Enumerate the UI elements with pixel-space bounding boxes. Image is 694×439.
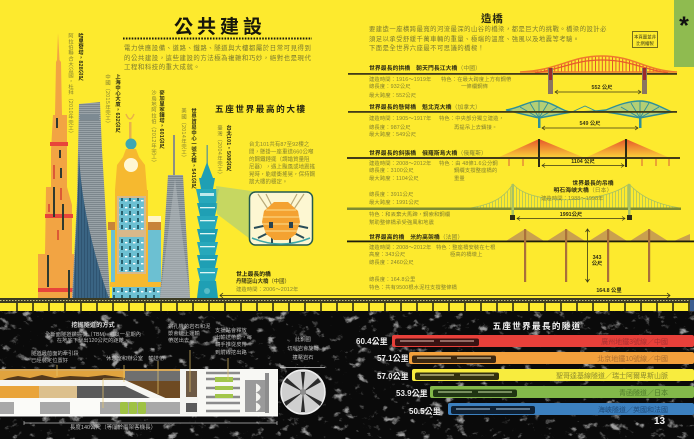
bridge 4: suspension bridge: 總長度：3911公尺	[369, 190, 414, 198]
bridge 3: cable-stayed bridge: 最大跨度：1104公尺	[369, 174, 419, 182]
bridge 3: cable-stayed bridge: 建造時間：2008～2012年	[369, 159, 432, 167]
bridge 3: cable-stayed bridge: 世界最長的斜張橋 俄羅斯島大橋（俄羅斯）	[369, 149, 487, 157]
vertical label: Abraj Al-Bait	[150, 89, 165, 165]
bridge 5: viaduct	[347, 229, 694, 294]
bridges intro paragraph: 要建造一座橫跨最寬的河流最深的山谷的橋梁，都是巨大的挑戰。橋梁的設計必	[369, 24, 607, 33]
text: spoil: 鑽孔機的岩石和泥	[168, 322, 211, 330]
cutter head	[281, 370, 325, 414]
length dimension	[24, 421, 277, 431]
length dimension: 長度140公尺（等同於兩架客機長）	[70, 423, 156, 431]
tunnel 1: Guangzhou: 廣州地鐵3號線／中國	[601, 337, 668, 346]
longest bridge note: 建造時間：2006～2012年	[236, 285, 299, 293]
bridge 4: suspension bridge: 建造時間：1988～1998年	[541, 194, 604, 202]
bridge 1: arch bridge: 552 公尺	[592, 83, 613, 91]
vertical label: Taipei 101: 臺灣（2004年完工）	[216, 124, 223, 178]
bridge 5: viaduct: 世界最高的橋 米約高架橋（法國）	[369, 233, 463, 241]
text: front shield: 已經裝定位置好	[31, 356, 69, 364]
building: One World Trade Center	[160, 135, 190, 298]
text: support station: 支援站會釋放	[215, 326, 247, 334]
zoom wedge from tower to damper	[216, 186, 258, 245]
building: Shanghai Tower	[72, 102, 110, 298]
vertical label: Abraj Al-Bait: 麥加皇家鐘塔，601公尺	[158, 89, 165, 150]
bridges intro paragraph: 下面是全世界六座最不可思議的橋樑！	[369, 43, 485, 52]
bridge 3: cable-stayed bridge: 鋼纜支撐整座橋的	[454, 166, 497, 174]
note box: not to scale: 比例繪製	[636, 40, 654, 47]
bridge 4: suspension bridge: 幫助整條橋承受強風和地震	[369, 218, 435, 226]
railway bridge deck	[0, 298, 694, 312]
vertical label: One World Trade Center	[180, 107, 197, 190]
bridge 1: arch bridge: 建造時間：1916～1919年	[369, 75, 432, 83]
bridge 2: cantilever bridge: 世界最長的懸臂橋 魁北克大橋（加拿大）	[369, 103, 481, 111]
diagram leader lines	[57, 350, 228, 408]
tunnel 3: Gotthard: 57.0公里	[377, 372, 409, 381]
text: front shield: 隧道最前面的牽引段	[31, 349, 79, 357]
tunnel 2: Beijing	[377, 352, 694, 364]
bridge 5: viaduct: 總長度：164.8公里	[369, 275, 416, 283]
intro paragraph: 的公共建設，這些建設的方法極為複雜和巧妙，絕對也是現代	[124, 53, 311, 62]
bridge 5: viaduct: 特色：整座橋安裝在七根	[436, 243, 496, 251]
text: spoil: 帶送出去	[168, 336, 190, 344]
text: support station: 輛手推從皮帶	[215, 340, 247, 348]
tunnel 3: Gotthard	[377, 369, 694, 381]
bridge 2: cantilever bridge	[348, 101, 677, 138]
bridge 2: cantilever bridge: 總長度：987公尺	[369, 123, 411, 131]
bridge 2: cantilever bridge: 建造時間：1905～1917年	[369, 114, 432, 122]
bridge 4: suspension bridge	[347, 179, 681, 226]
tunnel 5: Channel: 海峽隧道／英國和法國	[598, 405, 668, 414]
longest bridge note: 丹陽崑山大橋（中國）	[236, 277, 290, 285]
callout: tuned mass damper	[250, 192, 312, 245]
text: how tunnels are bored: 在地底下鑿出120公尺的距離。	[57, 336, 129, 344]
bridge 5: viaduct: 164.8 公里	[596, 286, 622, 294]
vertical label: Burj Khalifa	[67, 32, 84, 137]
bridge 2: cantilever bridge: 特色：中央部分獨立建造，	[439, 114, 504, 122]
green section tab with asterisk: *	[679, 12, 689, 40]
bridges intro paragraph	[369, 24, 607, 52]
tunnel 4: Seikan: 青函隧道／日本	[619, 388, 668, 397]
Taipei 101 damper text: 間，懸掛一座重達660公噸	[249, 148, 314, 156]
bridges intro paragraph: 須足以承受舒緩千萬車輛的重量、極端的溫度、強風以及地震等考驗。	[369, 34, 580, 43]
vertical label: Shanghai Tower: 中國（2015年完工）	[104, 73, 111, 127]
text: how tunnels are bored	[45, 321, 141, 344]
bridge 4: suspension bridge: 世界最長的吊橋	[572, 179, 614, 187]
bridge 4: suspension bridge: 特色：和丟棄大馬蹄，鋼索和鋼纜	[369, 210, 451, 218]
tunnel 5: Channel	[409, 403, 694, 416]
text: cutter head: 切削岩會旋轉	[287, 344, 320, 352]
tunnel 3: Gotthard: 聖哥達基線隧道／瑞士阿爾卑斯山脈	[556, 371, 668, 380]
rock texture	[0, 311, 694, 439]
tunnel 4: Seikan: 53.9公里	[396, 389, 428, 398]
vertical label: Shanghai Tower	[104, 73, 121, 134]
bridge 5: viaduct: 公尺	[592, 259, 603, 267]
text: how tunnels are bored: 全斷面隧道鑽掘機（TBM）可以一星期內	[45, 330, 141, 338]
bridge 1: arch bridge: 世界最長的拱橋 朝天門長江大橋（中國）	[369, 64, 481, 72]
bridge 3: cable-stayed bridge: 總長度：3100公尺	[369, 166, 414, 174]
tunnel 2: Beijing: 57.1公里	[377, 354, 409, 363]
vertical label: Burj Khalifa: 哈里發塔，828公尺	[77, 32, 84, 82]
bridge 4: suspension bridge: 最大跨度：1991公尺	[369, 198, 420, 206]
dotted divider	[123, 38, 312, 40]
text: support station	[215, 326, 253, 356]
tunnel 4: Seikan	[396, 386, 694, 398]
vertical label: Taipei 101	[216, 124, 232, 178]
title: 公共建設	[174, 16, 266, 38]
heading: bridges: 造橋	[481, 12, 504, 25]
bridge 5: viaduct: 特色：共有9500根水泥柱支撐整條橋	[369, 283, 458, 291]
note box: not to scale	[632, 32, 658, 48]
bridge 3: cable-stayed bridge: 1104 公尺	[571, 157, 595, 165]
heading: five longest tunnels: 五座世界最長的隧道	[492, 320, 582, 331]
bridge 2: cantilever bridge: 549 公尺	[580, 119, 601, 127]
vertical label: One World Trade Center: 美國（2014年完工）	[180, 107, 187, 161]
arrow: full bridge length	[220, 293, 670, 298]
bridge 4: suspension bridge: 1991公尺	[560, 210, 583, 218]
vertical label: Taipei 101: 台北101，508公尺	[225, 124, 232, 173]
bridge 5: viaduct: 極高的橋墩上	[450, 250, 483, 258]
text: cutter head: 撞擊岩石	[292, 353, 314, 361]
bridge 2: cantilever bridge: 最大跨度：549公尺	[369, 130, 417, 138]
Taipei 101 damper text: 尼器），遇上颱風或地震搖	[249, 162, 316, 170]
Taipei 101 damper text: 台北101共有87至92樓之	[249, 140, 310, 148]
page background	[0, 0, 694, 311]
text: front shield	[31, 349, 79, 364]
tunnel 1: Guangzhou	[356, 335, 694, 347]
text: spoil: 漿會送上運輸	[168, 329, 200, 337]
bridge 3: cable-stayed bridge: 特色：由 48條1.6公分鋼	[439, 159, 498, 167]
bridge 1: arch bridge: 一條纜鋼條	[461, 82, 489, 90]
vertical label: Shanghai Tower: 上海中心大廈，632公尺	[114, 73, 121, 134]
Taipei 101 damper text: 的鋼鐵錘擺（調諧質量阻	[249, 155, 310, 163]
intro paragraph: 工程和科技的重大成就。	[124, 62, 200, 71]
page number: 13	[654, 416, 666, 427]
text: rest rooms and conveyor: 休息室和辦公室 輸送帶	[106, 354, 164, 362]
text: how tunnels are bored: 挖掘隧道的方式	[71, 321, 115, 329]
bridge 5: viaduct: 高度：343公尺	[369, 250, 406, 258]
bridge 4: suspension bridge: 明石海峽大橋（日本）	[554, 186, 612, 194]
tunnel 2: Beijing: 北京地鐵10號線／中國	[597, 354, 668, 363]
text: spoil	[168, 322, 211, 344]
Taipei 101 damper text	[249, 140, 316, 186]
bridge 5: viaduct: 建造時間：2008～2012年	[369, 243, 432, 251]
vertical label: One World Trade Center: 世界貿易中心一號大樓，541公尺	[190, 107, 197, 190]
vertical label: Burj Khalifa: 阿拉伯聯合大公國，杜拜（2010年完工）	[67, 32, 74, 137]
vertical label: Abraj Al-Bait: 沙烏地阿拉伯（2012年完工）	[150, 90, 157, 165]
intro paragraph: 電力供應設備、道路、鐵路、隧道與大樓都屬於日常可見得到	[124, 43, 311, 52]
building: Taipei 101	[196, 145, 219, 298]
text: support station: 出輸送帶動，每	[215, 333, 253, 341]
bridge 3: cable-stayed bridge	[347, 139, 680, 182]
text: support station: 到前線挖出路	[215, 348, 247, 356]
longest bridge note: 世上最長的橋	[236, 270, 271, 278]
bridge 1: arch bridge: 最大跨度：552公尺	[369, 91, 417, 99]
tunnel boring machine diagram	[0, 369, 278, 416]
note box: not to scale: 本頁圖並非	[634, 34, 657, 40]
tunnel 5: Channel: 50.5公里	[409, 407, 441, 416]
longest bridge note	[236, 270, 299, 293]
bridge 5: viaduct: 343	[593, 255, 601, 261]
bridge 2: cantilever bridge: 再提吊上去鑄接。	[454, 123, 497, 131]
bridge 1: arch bridge	[348, 56, 677, 99]
Taipei 101 damper text: 晃時，能緩衝搖晃，保持鋼	[249, 170, 316, 178]
bridge 3: cable-stayed bridge: 重量	[454, 174, 465, 182]
building: Burj Khalifa	[38, 33, 74, 298]
black ground band	[0, 311, 694, 439]
bridge 5: viaduct: 總長度：2460公尺	[369, 258, 414, 266]
text: cutter head	[280, 335, 325, 368]
bridge 1: arch bridge: 總長度：932公尺	[369, 82, 411, 90]
green section tab with asterisk	[674, 0, 694, 67]
bridge 1: arch bridge: 特色：在最大跨度上方有鋼帶	[441, 75, 511, 83]
building: Abraj Al-Bait clock tower	[108, 114, 162, 298]
text: cutter head: 此鋼圈	[295, 335, 311, 343]
Taipei 101 damper text: 筋大樓的穩定。	[249, 178, 288, 186]
heading: five tallest buildings: 五座世界最高的大樓	[215, 103, 307, 114]
tunnel 1: Guangzhou: 60.4公里	[356, 337, 388, 346]
intro paragraph	[124, 43, 311, 71]
